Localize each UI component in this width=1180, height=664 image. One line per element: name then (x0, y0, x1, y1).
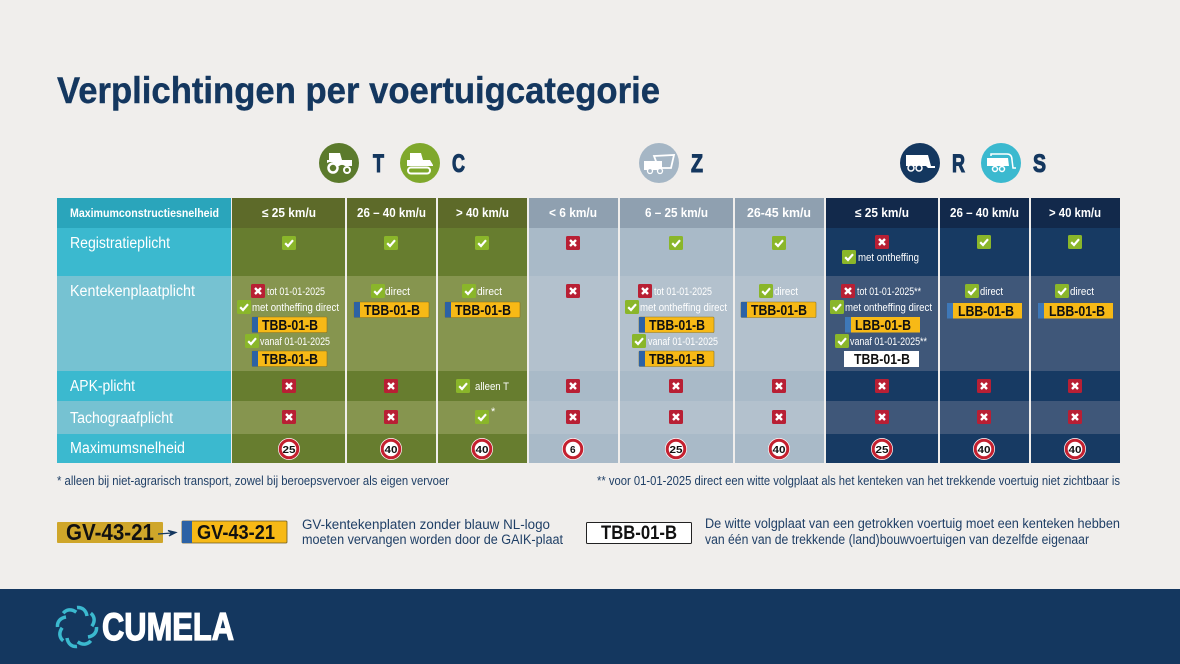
table column: Z 6-25 km/u: TBB-01-B (649, 352, 705, 368)
legend text: white plate: van één van de trekkende (land)bouwvoertuigen van dezelfde eigenaar (705, 532, 1089, 547)
table column: T/C over 40 km/u: * (491, 406, 496, 418)
title: Verplichtingen per voertuigcategorie (57, 70, 660, 111)
table column: T/C over 40 km/u: alleen T (475, 381, 509, 393)
table column: R/S 26-40 km/u (940, 198, 1029, 463)
legend: white trailer plate: TBB-01-B (601, 523, 677, 544)
table column: T/C 26-40 km/u (347, 198, 436, 463)
category icon: loader Z (639, 143, 703, 183)
category icon: loader Z: Z (691, 150, 703, 178)
category icon: interchangeable machine S: S (1033, 150, 1046, 178)
legend text: white plate (705, 516, 1120, 547)
legend text: GV plates: GV-kentekenplaten zonder blauw NL-logo (302, 517, 550, 532)
table column: Z up to 6 km/u: < 6 km/u (549, 206, 597, 220)
table column: T/C up to 25 km/u: tot 01-01-2025 (267, 286, 325, 298)
table column: R/S up to 25 km/u: vanaf 01-01-2025** (850, 336, 928, 348)
table column: Z 26-45 km/u (735, 198, 824, 463)
category icon: trailer R: R (952, 150, 965, 178)
table column: T/C up to 25 km/u: TBB-01-B (262, 352, 318, 368)
legend text: white plate: De witte volgplaat van een getrokken voertuig moet een kenteken hebben (705, 516, 1120, 531)
table column: Z up to 6 km/u: 6 (570, 445, 576, 456)
table column: R/S up to 25 km/u: met ontheffing direct (845, 302, 932, 314)
table column: Z 6-25 km/u: 25 (670, 445, 683, 456)
table column: R/S 26-40 km/u: direct (980, 286, 1003, 298)
table column: row labels: Kentekenplaatplicht (70, 283, 196, 300)
table column: row labels: Tachograafplicht (70, 410, 174, 427)
category icon: interchangeable machine S (981, 143, 1046, 183)
legend text: GV plates: moeten vervangen worden door de GAIK-plaat (302, 532, 563, 547)
table column: T/C up to 25 km/u: 25 (282, 445, 296, 456)
table column: T/C over 40 km/u: TBB-01-B (455, 303, 511, 319)
table column: Z 26-45 km/u: 26-45 km/u (747, 206, 811, 220)
table column: R/S over 40 km/u: > 40 km/u (1049, 206, 1101, 220)
table column: row labels (57, 198, 231, 463)
table column: Z 6-25 km/u: tot 01-01-2025 (654, 286, 712, 298)
table column: T/C over 40 km/u (438, 198, 527, 463)
table column: T/C up to 25 km/u: met ontheffing direct (252, 302, 339, 314)
table column: Z 6-25 km/u: vanaf 01-01-2025 (648, 336, 718, 348)
table column: Z 6-25 km/u: TBB-01-B (649, 318, 705, 334)
table column: Z 6-25 km/u (620, 198, 733, 463)
table column: R/S over 40 km/u: LBB-01-B (1049, 304, 1105, 320)
table column: R/S up to 25 km/u: ≤ 25 km/u (855, 206, 909, 220)
table column: T/C 26-40 km/u: direct (385, 286, 410, 298)
table column: T/C over 40 km/u: direct (477, 286, 502, 298)
table column: R/S up to 25 km/u: tot 01-01-2025** (857, 286, 922, 298)
table column: T/C 26-40 km/u: 26 – 40 km/u (357, 206, 426, 220)
table column: R/S up to 25 km/u: 25 (876, 445, 889, 456)
table column: R/S up to 25 km/u: TBB-01-B (854, 352, 910, 368)
table column: row labels: APK-plicht (70, 378, 136, 395)
table column: row labels: Registratieplicht (70, 235, 171, 252)
legend: old GV plate: GV-43-21 (66, 519, 154, 545)
category icon: tractor T (319, 143, 384, 183)
table column: Z up to 6 km/u (529, 198, 618, 463)
arrow: old plate to new plate (158, 530, 176, 536)
footer band (0, 589, 1180, 664)
table column: T/C over 40 km/u: > 40 km/u (456, 206, 509, 220)
table column: Z 6-25 km/u: met ontheffing direct (640, 302, 727, 314)
table column: R/S 26-40 km/u: 40 (978, 445, 991, 456)
footnote: single asterisk: * alleen bij niet-agrarisch transport, zowel bij beroepsvervoer als eigen vervoer (57, 473, 450, 488)
category icon: tracked tractor C (400, 143, 465, 183)
table column: T/C up to 25 km/u: vanaf 01-01-2025 (260, 336, 330, 348)
table column: T/C 26-40 km/u: 40 (384, 445, 398, 456)
table column: row labels: Maximumsnelheid (70, 440, 185, 457)
category icon: tracked tractor C: C (452, 150, 465, 178)
table column: R/S over 40 km/u: 40 (1068, 445, 1082, 456)
category icon: trailer R (900, 143, 965, 183)
table column: Z 26-45 km/u: 40 (772, 445, 786, 456)
table column: row labels: Maximumconstructiesnelheid (70, 206, 219, 220)
table column: T/C 26-40 km/u: TBB-01-B (364, 303, 420, 319)
table column: R/S over 40 km/u (1031, 198, 1120, 463)
logo icon: swirl (56, 606, 98, 648)
table column: R/S up to 25 km/u: met ontheffing (858, 252, 919, 264)
table column: R/S 26-40 km/u: LBB-01-B (958, 304, 1014, 320)
table column: T/C up to 25 km/u: TBB-01-B (262, 318, 318, 334)
logo wordmark: CUMELA (102, 606, 234, 649)
table column: R/S over 40 km/u: direct (1070, 286, 1094, 298)
table column: R/S up to 25 km/u (826, 198, 938, 463)
table column: T/C over 40 km/u: 40 (476, 445, 489, 456)
table column: T/C up to 25 km/u (232, 198, 345, 463)
table column: Z 26-45 km/u: TBB-01-B (751, 303, 807, 319)
table column: T/C up to 25 km/u: ≤ 25 km/u (262, 206, 316, 220)
category icon: tractor T: T (373, 150, 384, 178)
table column: Z 6-25 km/u: 6 – 25 km/u (645, 206, 708, 220)
legend text: GV plates (302, 517, 563, 547)
table column: R/S up to 25 km/u: LBB-01-B (855, 318, 911, 334)
table column: Z 26-45 km/u: direct (774, 286, 798, 298)
table column: R/S 26-40 km/u: 26 – 40 km/u (950, 206, 1019, 220)
legend: new GV plate: GV-43-21 (197, 522, 275, 544)
